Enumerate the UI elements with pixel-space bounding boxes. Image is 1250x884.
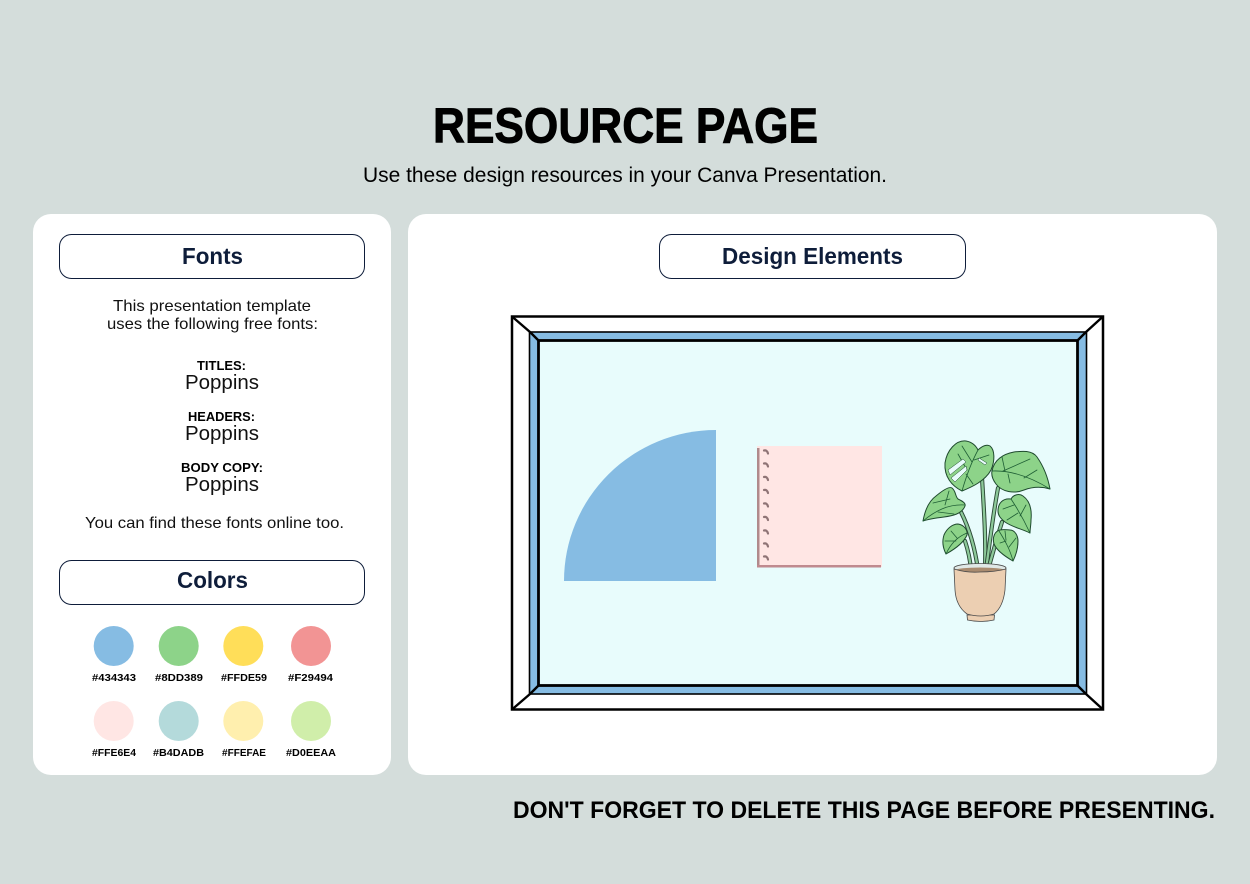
quarter circle shape bbox=[564, 430, 716, 581]
swatch: pale teal: #B4DADB bbox=[153, 747, 204, 759]
heading: fonts bbox=[60, 234, 364, 278]
swatch: green bbox=[155, 626, 203, 684]
footer note: DON'T FORGET TO DELETE THIS PAGE BEFORE PRESENTING. bbox=[513, 797, 1215, 824]
swatch: pale green bbox=[286, 701, 336, 759]
text block: body copy font: BODY COPY: bbox=[181, 460, 263, 475]
text block: font note: You can find these fonts online too. bbox=[85, 515, 344, 532]
swatch: pale yellow bbox=[222, 701, 266, 759]
color swatches bbox=[92, 626, 336, 759]
window frame bbox=[512, 316, 1103, 710]
text block: font intro: uses the following free fonts: bbox=[107, 316, 318, 333]
swatch: yellow bbox=[221, 626, 267, 684]
stems bbox=[961, 478, 1002, 570]
heading: fonts: Fonts bbox=[182, 243, 243, 269]
heading: colors: Colors bbox=[177, 567, 248, 593]
heading: design elements bbox=[660, 234, 966, 278]
text block: font intro bbox=[107, 298, 318, 333]
text block: font intro: This presentation template bbox=[113, 298, 311, 315]
heading: design elements: Design Elements bbox=[722, 243, 903, 269]
text block: body copy font bbox=[181, 460, 263, 496]
text block: titles font: TITLES: bbox=[197, 358, 246, 373]
text block: headers font: HEADERS: bbox=[188, 409, 255, 424]
subtitle: Use these design resources in your Canva Presentation. bbox=[363, 164, 887, 187]
panel: fonts and colors bbox=[33, 214, 391, 775]
text block: body copy font: Poppins bbox=[185, 474, 259, 496]
notepad bbox=[757, 446, 882, 568]
icon: potted monstera plant bbox=[923, 441, 1050, 622]
swatch: blue: #434343 bbox=[92, 672, 136, 684]
swatch: pale pink: #FFE6E4 bbox=[92, 747, 136, 759]
title: RESOURCE PAGE bbox=[433, 100, 818, 154]
swatch: green: #8DD389 bbox=[155, 672, 203, 684]
swatch: blue bbox=[92, 626, 136, 684]
leaves bbox=[945, 441, 994, 491]
panel: design elements bbox=[408, 214, 1217, 775]
swatch: coral bbox=[288, 626, 333, 684]
swatch: pale yellow: #FFEFAE bbox=[222, 747, 266, 759]
text block: headers font bbox=[185, 409, 259, 445]
swatch: yellow: #FFDE59 bbox=[221, 672, 267, 684]
text block: titles font bbox=[185, 358, 259, 394]
text block: headers font: Poppins bbox=[185, 423, 259, 445]
heading: colors bbox=[60, 560, 364, 604]
swatch: coral: #F29494 bbox=[288, 672, 333, 684]
text block: titles font: Poppins bbox=[185, 372, 259, 394]
swatch: pale pink bbox=[92, 701, 136, 759]
pot bbox=[954, 564, 1006, 622]
swatch: pale green: #D0EEAA bbox=[286, 747, 336, 759]
swatch: pale teal bbox=[153, 701, 204, 759]
